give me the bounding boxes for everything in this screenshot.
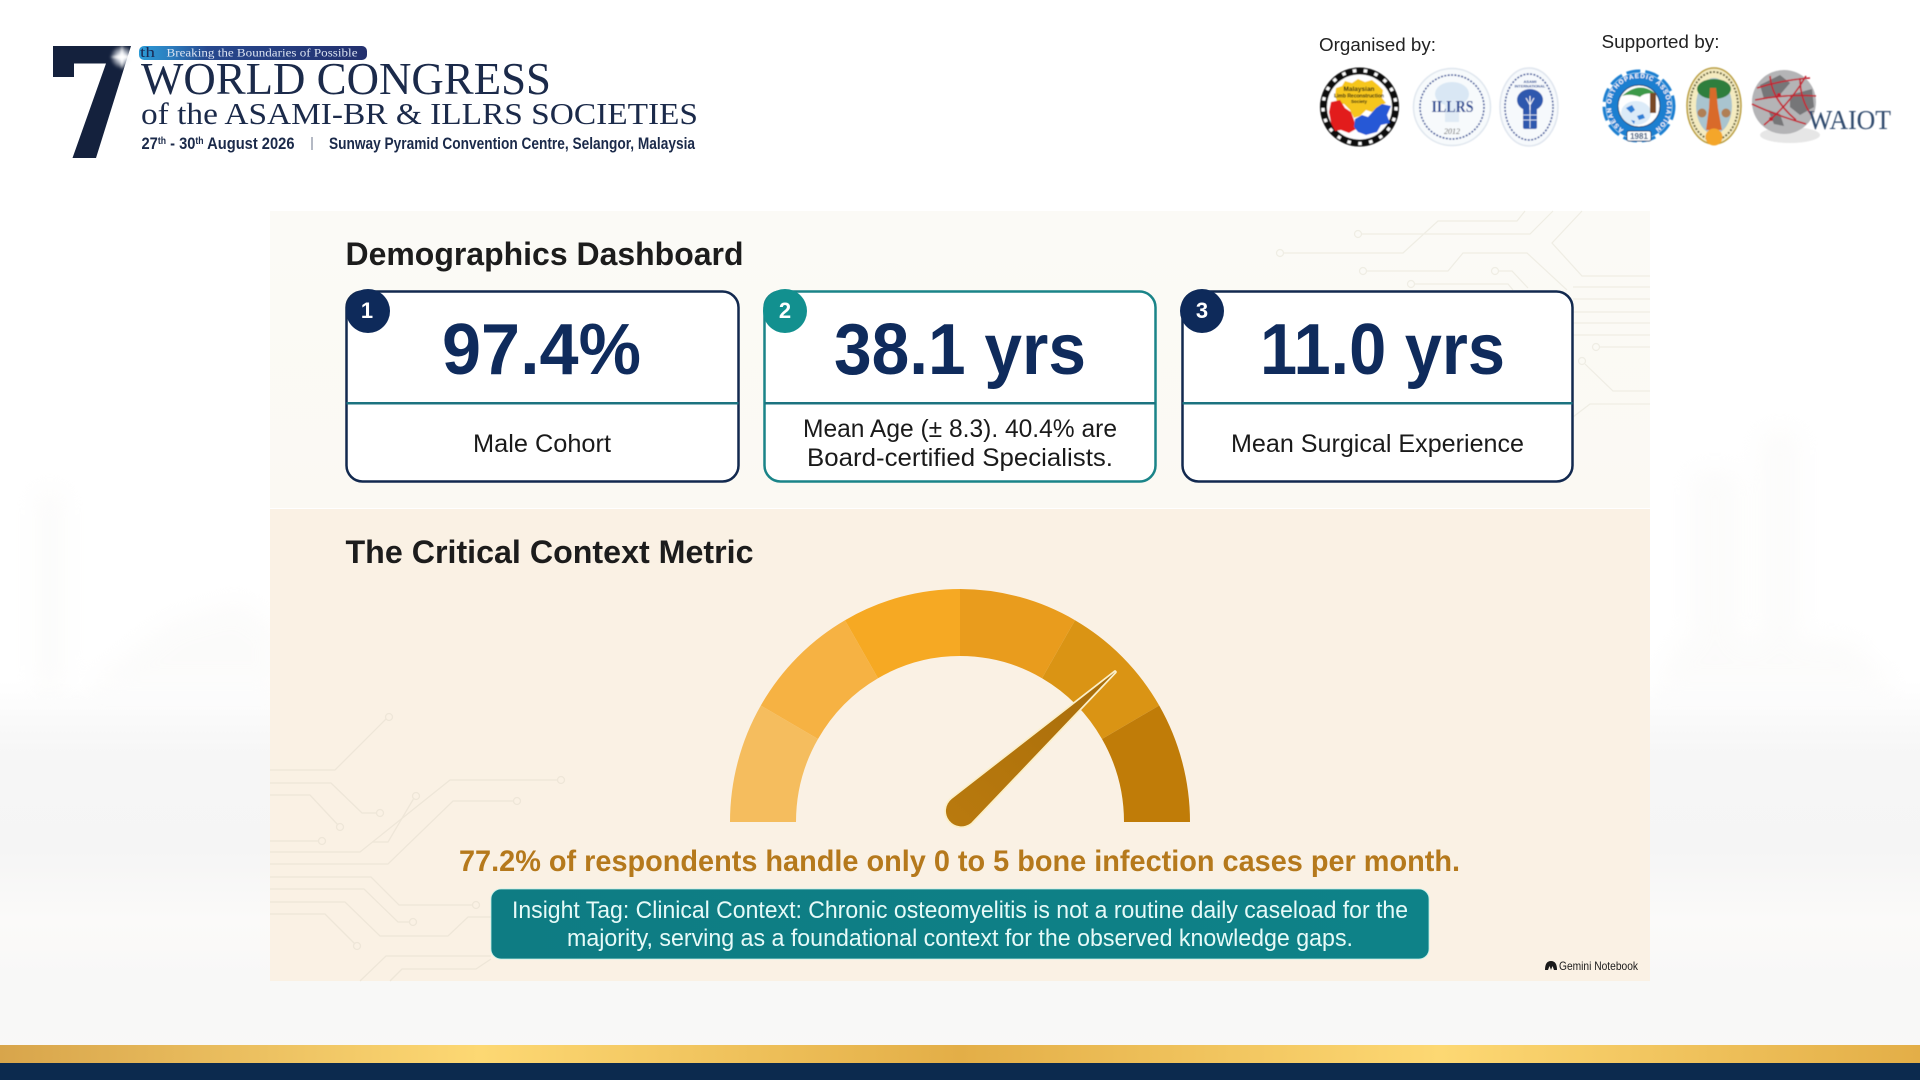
footer navy band [0,1063,1920,1080]
supporters block [1602,32,1892,146]
logo: WAIOT globe and wordmark [1752,70,1891,143]
logo: Malaysian Limb Reconstruction Society: Malaysian [1343,86,1375,93]
congress venue: Sunway Pyramid Convention Centre, Selangor, Malaysia [329,134,695,153]
label mean age [803,415,1117,472]
congress date: th [158,136,166,147]
insight tag: Insight Tag: Clinical Context: Chronic osteomyelitis is not a routine daily caseload for the [512,897,1408,924]
panel: critical context metric [270,509,1650,981]
logo: Asean Orthopaedic Association: ASEAN ORTHOPAEDIC ASSOCIATION [1606,72,1672,133]
congress date: August 2026 [204,134,294,153]
badge 2: 2 [779,298,791,323]
insight tag: majority, serving as a foundational context for the observed knowledge gaps. [567,925,1353,952]
gauge chart [730,589,1190,826]
panel: demographics dashboard [270,211,1650,508]
logo: ILLRS [1414,68,1490,146]
label mean age: Board-certified Specialists. [807,444,1113,472]
gauge needle [946,672,1115,826]
footer gold band [0,1045,1920,1063]
card 3: surgical experience [1180,289,1572,482]
card 2: mean age [763,289,1156,482]
header: congress logo [53,44,698,158]
circuit pattern bottom left [270,714,564,981]
tagline pill: th [140,45,156,61]
organisers block [1319,35,1558,146]
heading: The Critical Context Metric: The Critical Context Metric [346,534,754,570]
label mean age: Mean Age (± 8.3). 40.4% are [803,415,1117,443]
congress date: th [195,136,204,147]
logo: ASAMI International [1500,68,1558,146]
organised by label: Organised by: [1319,35,1436,55]
logo numeral 7 [53,46,131,158]
logo: ILLRS: 2012 [1444,127,1460,136]
gauge segments [730,589,1190,822]
logo: ILLRS: ILLRS [1432,97,1474,116]
supported by label: Supported by: [1602,32,1720,52]
tagline pill: Breaking the Boundaries of Possible [166,46,358,60]
logo: ASAMI International: INTERNATIONAL [1515,84,1546,88]
logo: Malaysian Limb Reconstruction Society: Limb Reconstruction [1334,94,1384,100]
tagline pill [139,45,367,61]
congress date: 27 [142,134,160,153]
insight tag [491,889,1429,959]
value 38.1 yrs: 38.1 yrs [834,310,1086,390]
logo: Malaysian Orthopaedic Association [1687,68,1741,146]
value 11.0 yrs: 11.0 yrs [1260,310,1505,390]
badge 1 [346,289,390,333]
badge 3: 3 [1196,298,1208,323]
congress title: WORLD CONGRESS [141,53,551,104]
watermark: Gemini Notebook [1559,959,1639,973]
value 97.4%: 97.4% [442,310,641,390]
badge 2 [763,289,807,333]
badge 3 [1180,289,1224,333]
key statistic: 77.2% of respondents handle only 0 to 5 bone infection cases per month. [459,845,1460,878]
label Mean Surgical Experience: Mean Surgical Experience [1231,430,1524,458]
logo: ASAMI International: ASAMI [1524,79,1536,84]
label Male Cohort: Male Cohort [473,430,611,458]
logo: WAIOT globe and wordmark: WAIOT [1808,105,1891,135]
circuit pattern top right [1276,211,1650,417]
logo: Malaysian Limb Reconstruction Society [1323,70,1396,144]
heading: Demographics Dashboard: Demographics Dashboard [346,236,744,272]
badge 1: 1 [361,298,373,323]
logo: Malaysian Limb Reconstruction Society: Society [1351,99,1367,104]
logo: Asean Orthopaedic Association: 1981 [1630,132,1648,141]
logo sparkle [110,44,134,70]
card 1: male cohort [346,289,738,482]
congress date: - 30 [166,134,195,153]
congress subtitle: of the ASAMI-BR & ILLRS SOCIETIES [141,96,698,131]
